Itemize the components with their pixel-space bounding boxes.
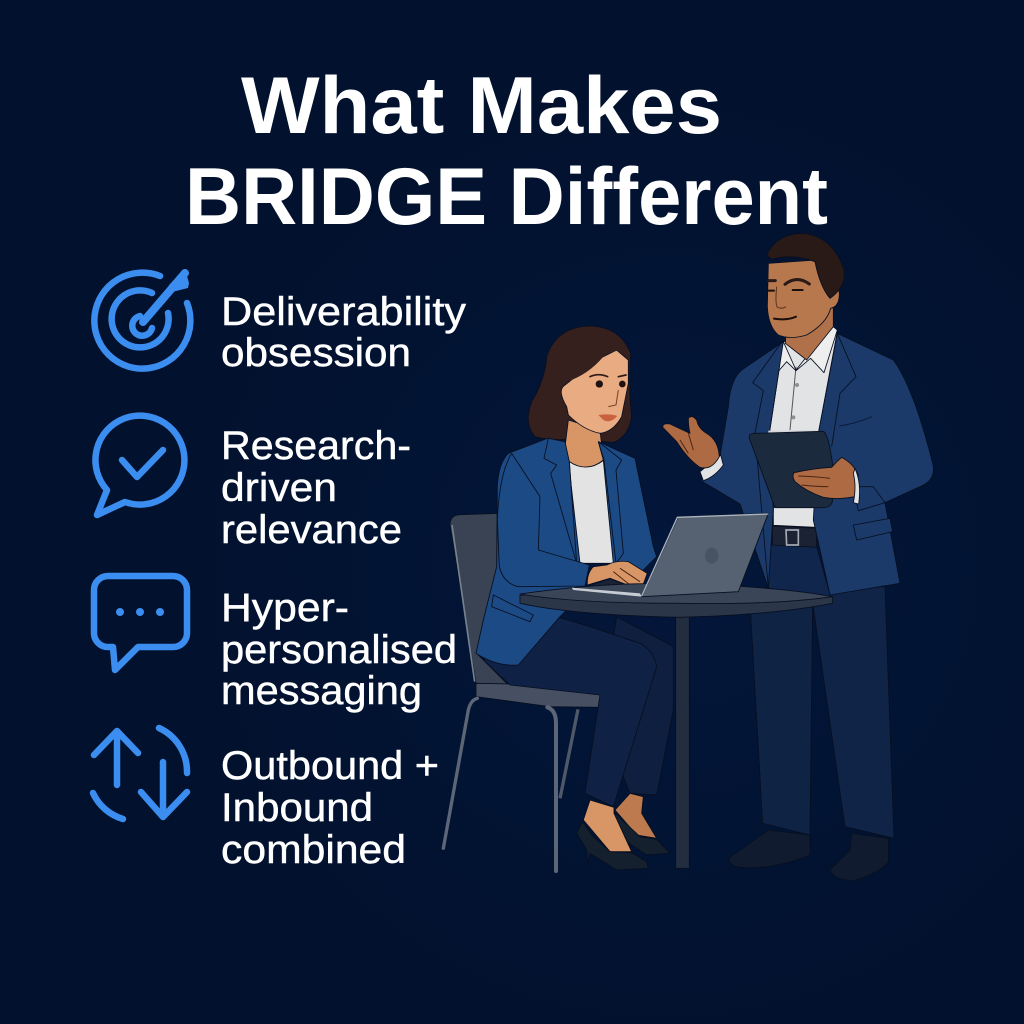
woman: front leg and shoe — [483, 617, 657, 870]
woman: jacket — [476, 438, 657, 665]
man: raised hand and cuff — [663, 417, 723, 481]
text: outbound + inbound combined: Outbound + — [221, 744, 439, 788]
text: research-driven relevance — [221, 424, 411, 552]
table — [520, 584, 833, 868]
icon: up and down arrows — [93, 728, 187, 819]
woman: neck and top — [565, 420, 616, 563]
man: shoes — [728, 830, 888, 881]
woman: hair back — [528, 326, 632, 443]
text: research-driven relevance: relevance — [221, 508, 402, 552]
title: BRIDGE Different — [185, 152, 828, 242]
icon: target with arrow — [94, 269, 190, 369]
chair — [443, 513, 601, 871]
man: hand holding tablet — [793, 457, 860, 504]
text: outbound + inbound combined: Inbound — [221, 786, 373, 830]
title — [185, 61, 828, 242]
man: jacket — [701, 333, 933, 595]
text: deliverability obsession — [221, 290, 466, 375]
man: head and hair — [767, 233, 844, 360]
laptop — [572, 513, 768, 597]
woman: hands on keyboard — [587, 561, 647, 589]
icon: speech bubble with check — [95, 416, 184, 515]
text: hyper-personalised messaging — [221, 586, 457, 713]
man: trousers — [750, 545, 894, 838]
text: deliverability obsession: Deliverability — [221, 290, 466, 334]
title: What Makes — [241, 61, 722, 151]
text: hyper-personalised messaging: personalised — [221, 628, 457, 672]
woman: face — [560, 332, 628, 433]
text: hyper-personalised messaging: messaging — [221, 669, 422, 713]
man: shirt and belt — [769, 327, 837, 547]
text: outbound + inbound combined: combined — [221, 828, 406, 872]
man: tablet — [749, 430, 833, 508]
text: deliverability obsession: obsession — [221, 331, 411, 375]
text: outbound + inbound combined — [221, 744, 439, 872]
illustration: two colleagues at a table — [443, 233, 933, 881]
text: research-driven relevance: driven — [221, 466, 337, 510]
text: research-driven relevance: Research- — [221, 424, 411, 468]
woman: back leg and shoe — [600, 617, 673, 855]
icon: message bubble with dots — [94, 576, 187, 670]
text: hyper-personalised messaging: Hyper- — [221, 586, 349, 630]
